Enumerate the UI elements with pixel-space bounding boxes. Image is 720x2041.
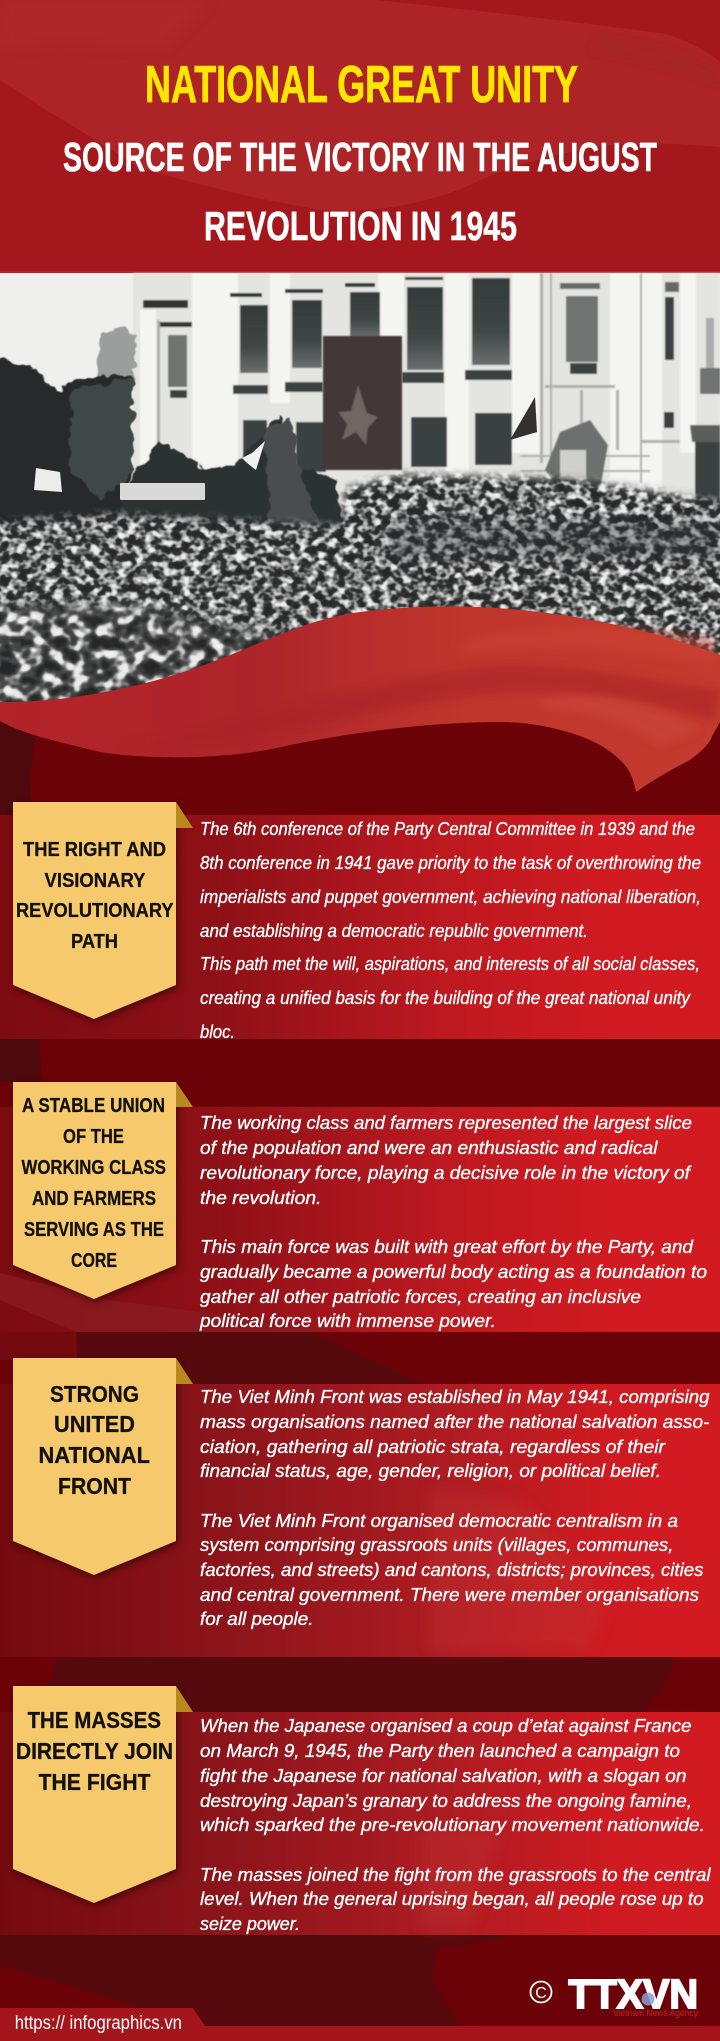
panel 1 ribbon label: THE RIGHT AND	[23, 838, 166, 861]
agency name: Vietnam News Agency	[613, 2008, 698, 2018]
header band	[0, 0, 720, 273]
copyright mark	[530, 1982, 552, 2002]
panel 2 diagonal shade	[0, 1273, 350, 1332]
panel 4 light swoosh	[420, 1830, 500, 1928]
panel 4 body text: fight the Japanese for national salvation, with a slogan on	[200, 1765, 686, 1786]
panel 4 ribbon label: THE FIGHT	[38, 1769, 151, 1795]
panel 2 ribbon label: OF THE	[63, 1125, 124, 1148]
panel 3 body text: ciation, gathering all patriotic strata, regardless of their	[200, 1436, 666, 1457]
panel 3 body text: system comprising grassroots units (villages, communes,	[200, 1534, 674, 1555]
panel 1 body text: creating a unified basis for the building of the great national unity	[200, 987, 692, 1008]
panel 1 ribbon label: REVOLUTIONARY	[16, 899, 174, 922]
panel 4 body text: The masses joined the fight from the grassroots to the central	[200, 1864, 711, 1885]
panel 3 ribbon label: FRONT	[58, 1473, 132, 1499]
panel 2 background	[0, 1107, 720, 1332]
panel 2 ribbon label: SERVING AS THE	[24, 1218, 164, 1241]
red banner with star	[323, 336, 537, 470]
panel 4 ribbon label	[13, 1686, 193, 1906]
red ribbon under the photo	[0, 606, 720, 792]
panel 4 body text: When the Japanese organised a coup d’etat against France	[200, 1715, 692, 1736]
panel 2 body text: gradually became a powerful body acting as a foundation to	[200, 1261, 707, 1282]
panel 3 body text: financial status, age, gender, religion, or political belief.	[200, 1460, 661, 1481]
crowd texture	[0, 468, 720, 655]
title line 3: REVOLUTION IN 1945	[204, 203, 517, 249]
panel 2 ribbon label: AND FARMERS	[32, 1187, 156, 1210]
panel 3 ribbon label: UNITED	[54, 1411, 135, 1437]
white poster	[34, 468, 62, 492]
panel 4 body text	[200, 1715, 711, 1934]
panel 3 body text: and central government. There were member organisations	[200, 1584, 699, 1605]
panel 2 body text: political force with immense power.	[199, 1310, 496, 1331]
globe emblem	[642, 1992, 654, 2006]
footer bar with website	[0, 2008, 720, 2041]
website url: https:// infographics.vn	[15, 2013, 182, 2034]
panel 3 light swoosh	[430, 1490, 610, 1650]
panel 2 body text: the revolution.	[200, 1187, 322, 1208]
panel 2 body text: gather all other patriotic forces, creating an inclusive	[200, 1286, 641, 1307]
logo: TTXVN Vietnam News Agency	[530, 1971, 698, 2018]
copyright mark: C	[535, 1985, 547, 2002]
panel 2 ribbon label: A STABLE UNION	[22, 1094, 165, 1117]
panel 1 ribbon label: PATH	[71, 930, 118, 953]
panel 4: masses join the fight	[0, 1686, 720, 1935]
trees	[0, 328, 135, 530]
title	[63, 56, 657, 249]
panel 4 body text: which sparked the pre-revolutionary movement nationwide.	[200, 1814, 705, 1835]
panel 2 body text: This main force was built with great effort by the Party, and	[200, 1236, 694, 1257]
panel 2 body text	[199, 1112, 707, 1331]
panel 3: united national front	[0, 1358, 720, 1657]
panel 2 body text: revolutionary force, playing a decisive role in the victory of	[200, 1162, 692, 1183]
panel 1 body text	[200, 818, 701, 1042]
panel 4 body text: seize power.	[200, 1913, 300, 1934]
panel 2 ribbon label	[13, 1082, 193, 1302]
panel 3 body text: The Viet Minh Front was established in May 1941, comprising	[200, 1386, 710, 1407]
panel 3 ribbon label: NATIONAL	[38, 1442, 150, 1468]
photo: crowd in front of the Hanoi Opera House	[0, 273, 720, 720]
panel 2 ribbon label: CORE	[71, 1249, 117, 1272]
panel 2: stable union	[0, 1082, 720, 1332]
panel 4 body text: on March 9, 1945, the Party then launched a campaign to	[200, 1740, 680, 1761]
panel 1 background	[0, 815, 720, 1039]
platform sign	[120, 483, 205, 500]
panel 1 ribbon label: VISIONARY	[44, 869, 146, 892]
building facade	[133, 273, 720, 513]
panel 3 body text: factories, and streets) and cantons, districts; provinces, cities	[200, 1559, 704, 1580]
panel 1 body text: and establishing a democratic republic government.	[200, 920, 588, 941]
dark foreground group with left flag	[120, 415, 345, 530]
white star on flag	[242, 441, 265, 470]
TTXVN wordmark: TTXVN	[568, 1971, 698, 2017]
panel 1: visionary path	[0, 802, 720, 1042]
panel 4 body text: destroying Japan’s granary to address the ongoing famine,	[200, 1790, 692, 1811]
panel 2 ribbon label: WORKING CLASS	[22, 1156, 166, 1179]
decorated emblem at the right entrance	[545, 420, 608, 490]
panel 3 body text: mass organisations named after the national salvation asso-	[200, 1411, 710, 1432]
panel 3 background	[0, 1384, 720, 1657]
panel 3 ribbon label: STRONG	[50, 1381, 139, 1407]
panel 2 body text: The working class and farmers represented the largest slice	[200, 1112, 692, 1133]
panel 3 body text: for all people.	[200, 1608, 314, 1629]
panel 3 body text	[200, 1386, 710, 1629]
panel 1 ribbon label	[13, 802, 193, 1022]
panel 4 body text: level. When the general uprising began, all people rose up to	[200, 1888, 704, 1909]
panel 3 body text: The Viet Minh Front organised democratic centralism in a	[200, 1510, 678, 1531]
background shapes: dark strip and map silhouette	[0, 715, 675, 2026]
panel 4 ribbon label: DIRECTLY JOIN	[16, 1738, 173, 1764]
panel 3 ribbon label	[13, 1358, 193, 1578]
panel 1 body text: bloc.	[200, 1021, 235, 1042]
panel 2 body text: of the population and were an enthusiastic and radical	[200, 1137, 658, 1158]
panel 4 background	[0, 1712, 720, 1935]
panel 4 ribbon label: THE MASSES	[28, 1707, 161, 1733]
